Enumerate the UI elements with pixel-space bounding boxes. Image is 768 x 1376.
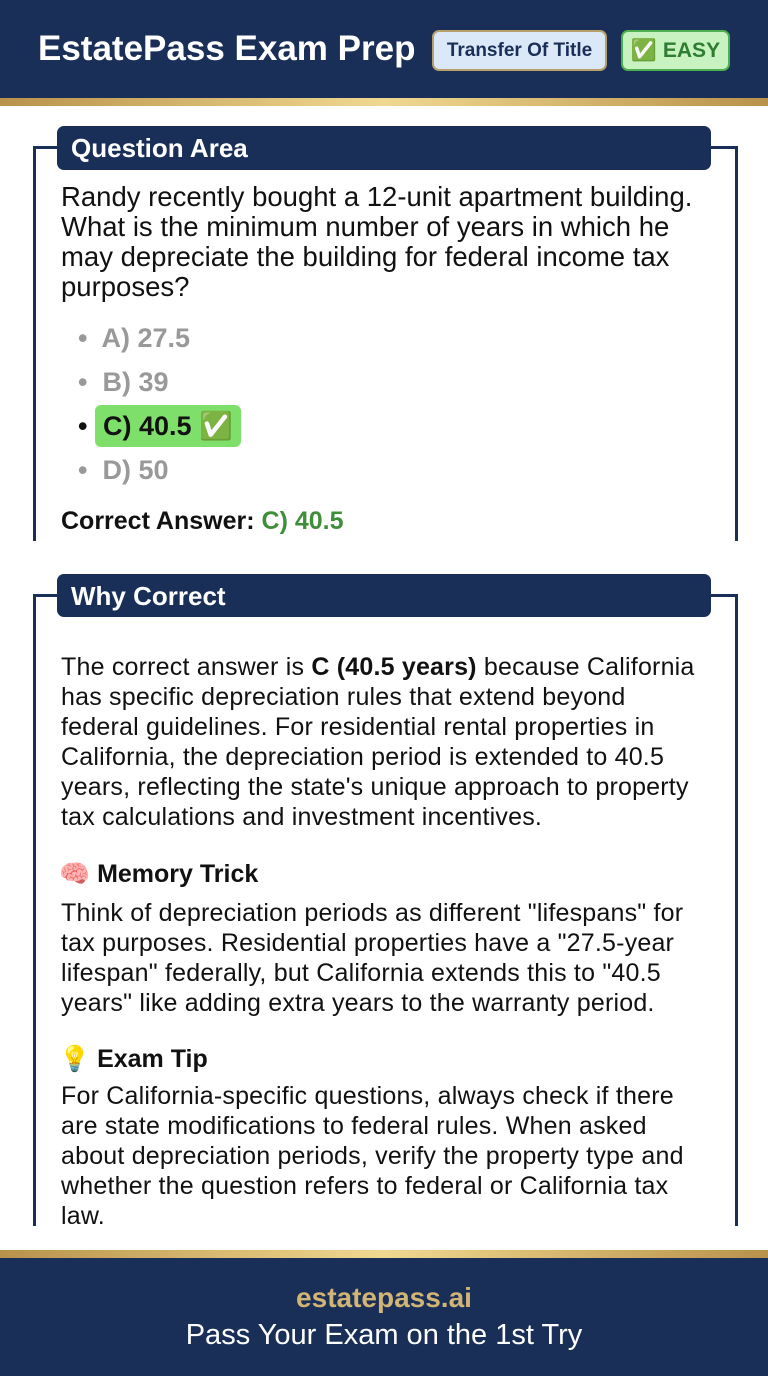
badge: topic: Transfer Of Title [447, 40, 592, 61]
exam tip text: are state modifications to federal rules. When asked [61, 1112, 647, 1140]
footer [0, 1258, 768, 1376]
memory trick text: lifespan" federally, but California extends this to "40.5 [61, 959, 661, 987]
question text: What is the minimum number of years in which he [61, 211, 669, 242]
badge: topic [432, 30, 607, 71]
exam tip text [61, 1082, 684, 1230]
explanation: years, reflecting the state's unique approach to property [61, 773, 689, 801]
option C correct [78, 405, 241, 447]
exam tip text: whether the question refers to federal or California tax [61, 1172, 668, 1200]
explanation: tax calculations and investment incentives. [61, 803, 542, 831]
heading: question area: Question Area [71, 133, 248, 163]
badge: difficulty [621, 30, 730, 71]
memory trick text: tax purposes. Residential properties have a "27.5-year [61, 929, 674, 957]
heading: why correct [57, 574, 711, 617]
heading: why correct: Why Correct [71, 581, 226, 611]
heading: memory trick: 🧠 Memory Trick [59, 860, 258, 888]
explanation: California, the depreciation period is extended to 40.5 [61, 743, 664, 771]
question text: may depreciate the building for federal income tax [61, 241, 669, 272]
footer tagline: Pass Your Exam on the 1st Try [186, 1319, 582, 1351]
exam tip text: law. [61, 1202, 105, 1230]
header [0, 0, 768, 100]
option B: • B) 39 [78, 367, 168, 397]
heading: question area [57, 126, 711, 170]
question text: purposes? [61, 271, 189, 302]
footer url: estatepass.ai [296, 1282, 472, 1313]
memory trick text [61, 899, 683, 1017]
option D: • D) 50 [78, 455, 168, 485]
panel: why correct [33, 574, 738, 1230]
option C correct: • [78, 411, 87, 441]
exam tip text: about depreciation periods, verify the property type and [61, 1142, 684, 1170]
option A: • A) 27.5 [78, 323, 190, 353]
exam tip text: For California-specific questions, always check if there [61, 1082, 674, 1110]
explanation: federal guidelines. For residential rental properties in [61, 713, 654, 741]
memory trick text: Think of depreciation periods as different "lifespans" for [61, 899, 683, 927]
badge: difficulty: ✅ EASY [631, 39, 720, 62]
memory trick text: years" like adding extra years to the warranty period. [61, 989, 655, 1017]
heading: exam tip: 💡 Exam Tip [59, 1045, 208, 1073]
explanation [61, 653, 695, 831]
title: EstatePass Exam Prep [38, 29, 415, 68]
correct answer: Correct Answer: C) 40.5 [61, 507, 344, 535]
panel: question area [33, 126, 738, 541]
explanation: The correct answer is C (40.5 years) because California [61, 653, 695, 681]
option C correct: C) 40.5 ✅ [103, 411, 233, 441]
question text [61, 181, 692, 302]
explanation: has specific depreciation rules that extend beyond [61, 683, 626, 711]
question text: Randy recently bought a 12-unit apartment building. [61, 181, 692, 212]
